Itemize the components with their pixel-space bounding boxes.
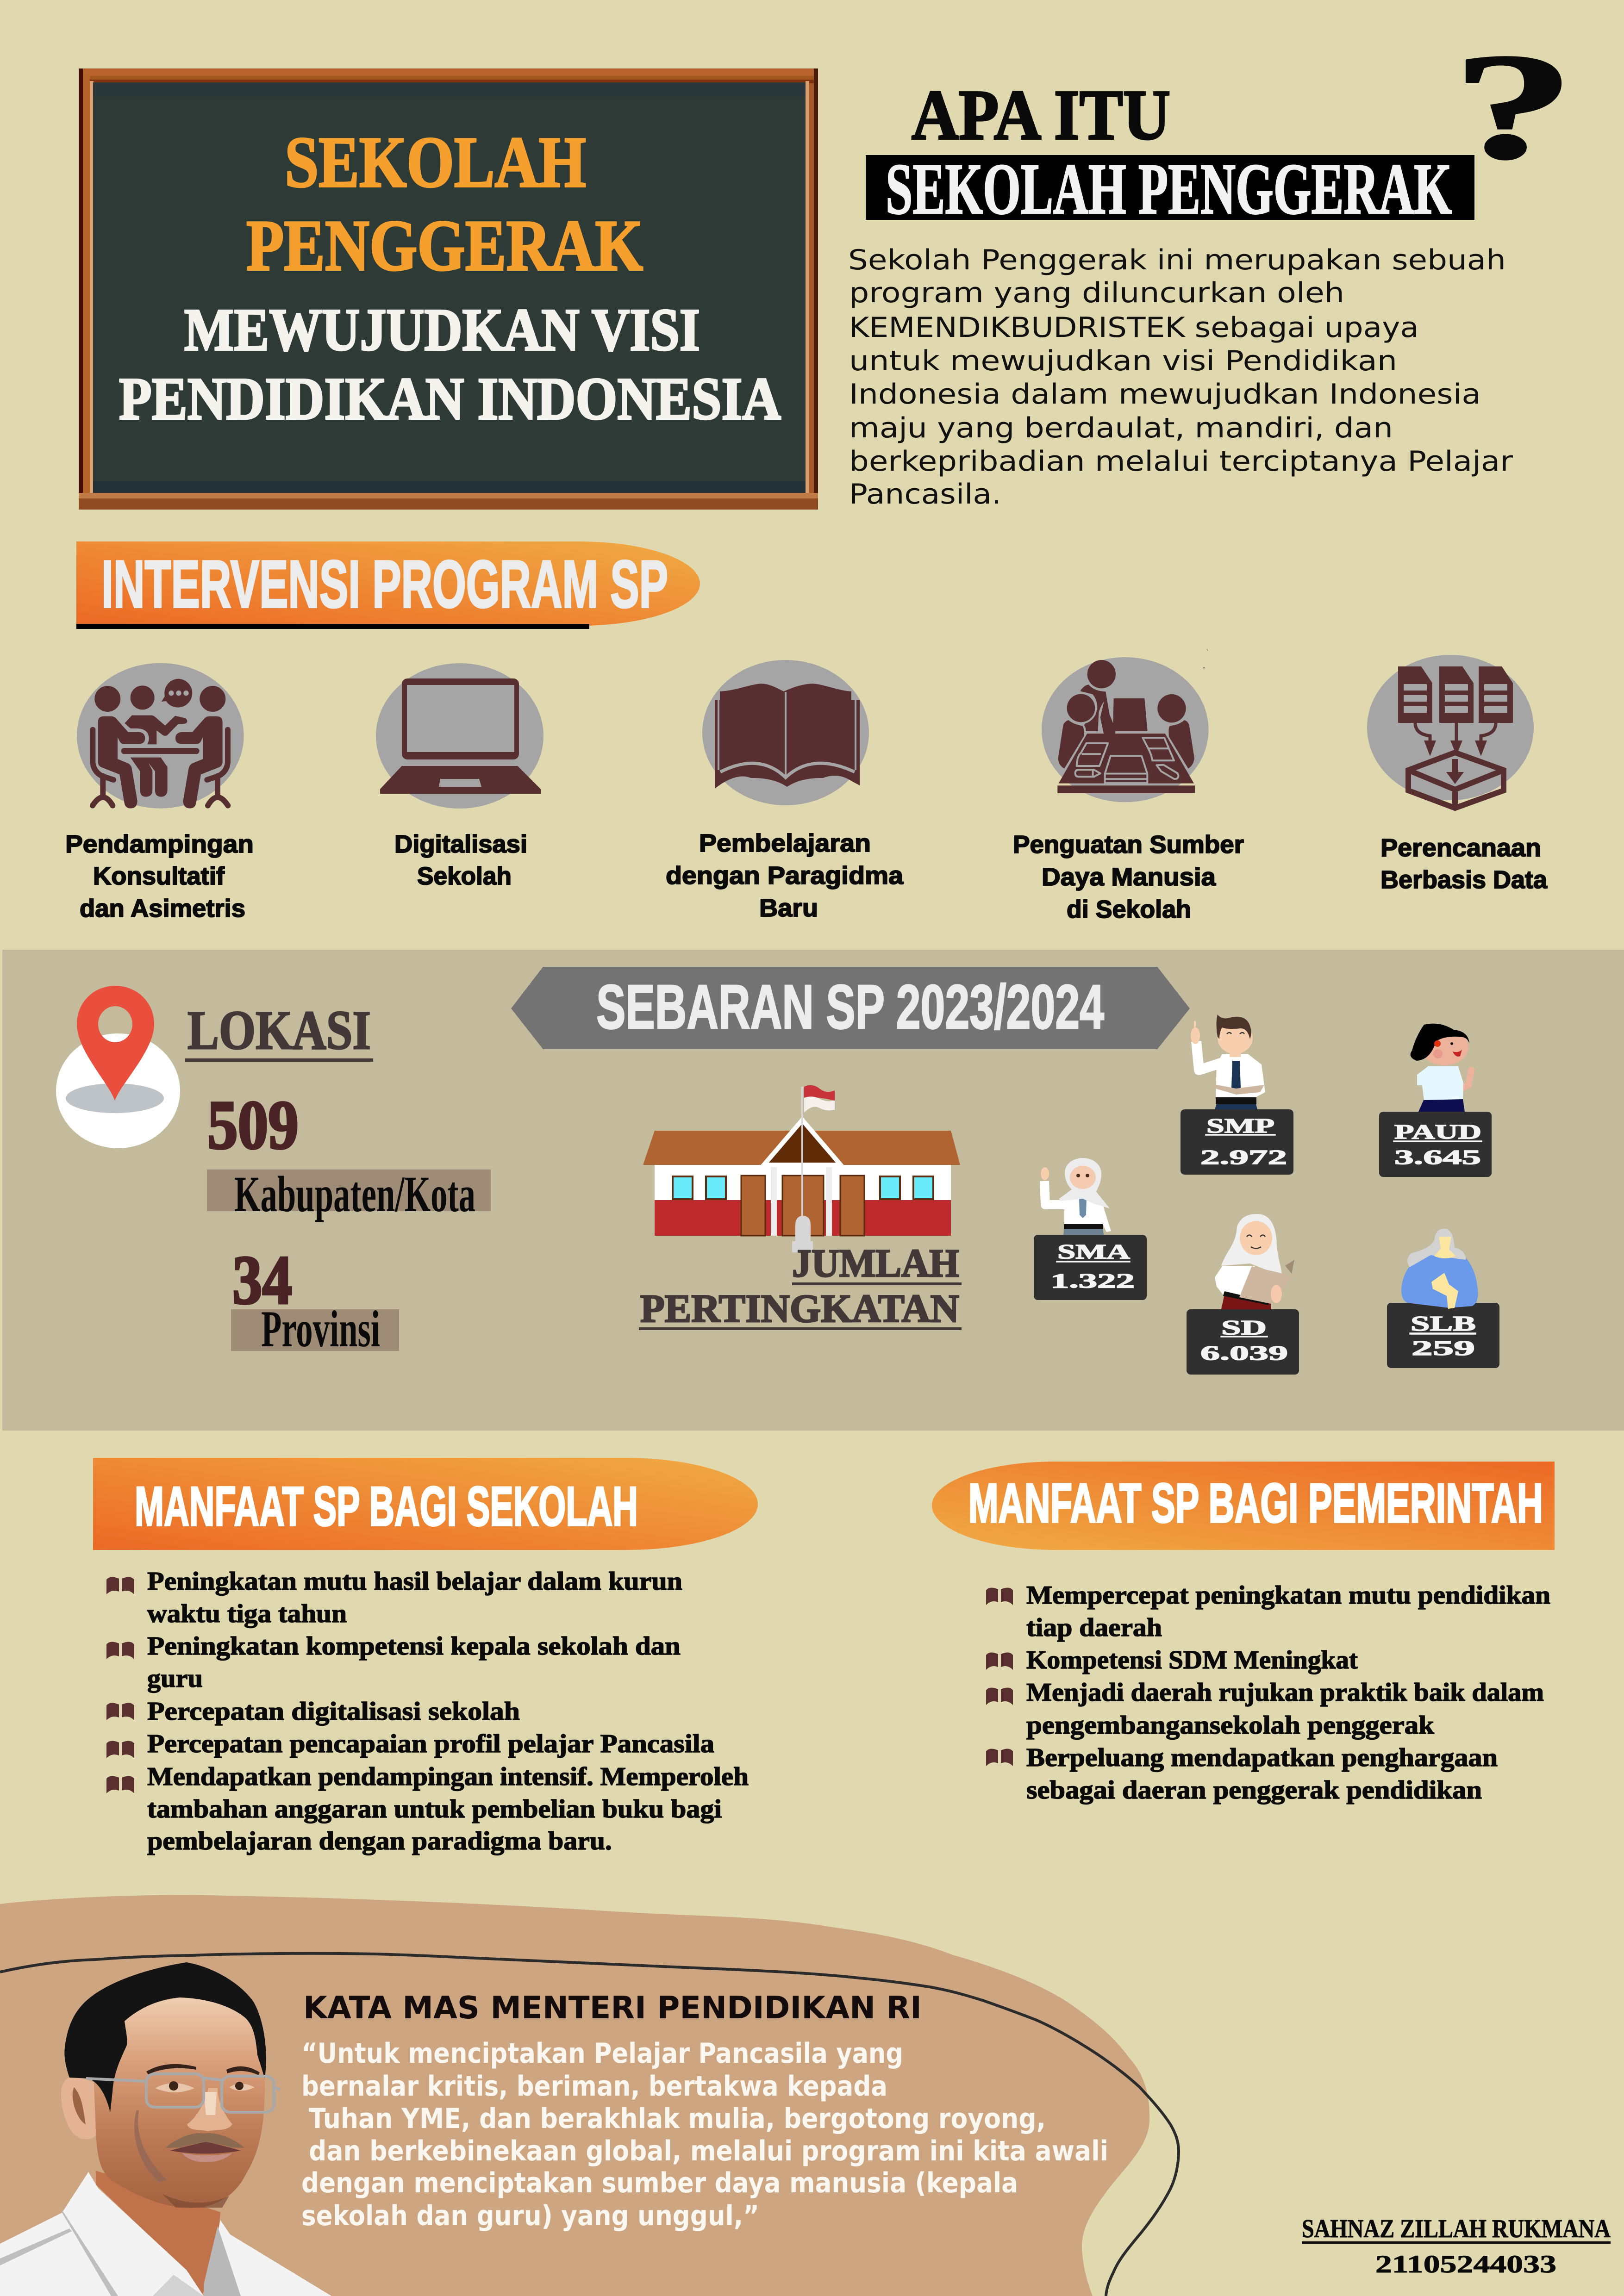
- banner: sebaran: [511, 967, 1190, 1049]
- stat: provinsi: Provinsi: [261, 1300, 380, 1358]
- icon: question mark: ?: [1452, 23, 1575, 190]
- heading: apa itu: APA ITU: [912, 76, 1170, 155]
- card: paud: PAUD: [1394, 1120, 1481, 1143]
- list: manfaat pemerintah: sebagai daeran penggerak pendidikan: [1026, 1776, 1482, 1804]
- list: manfaat pemerintah: Mempercepat peningkatan mutu pendidikan: [1026, 1581, 1550, 1610]
- stat: provinsi: [231, 1242, 399, 1358]
- labels: intervention programs: di Sekolah: [1067, 896, 1191, 923]
- stat: kabupaten kota: 509: [207, 1087, 299, 1164]
- heading: jumlah pertingkatan: PERTINGKATAN: [640, 1286, 959, 1331]
- labels: intervention programs: Baru: [759, 894, 818, 922]
- text block: definition: berkepribadian melalui terciptanya Pelajar: [849, 445, 1513, 478]
- card: smp: 2.972: [1200, 1146, 1287, 1169]
- list: manfaat pemerintah: Menjadi daerah rujukan praktik baik dalam: [1026, 1678, 1544, 1707]
- icon: laptop: [376, 663, 543, 809]
- heading: jumlah pertingkatan: [639, 1241, 962, 1331]
- heading: lokasi: LOKASI: [187, 999, 371, 1061]
- title: PENGGERAK: [246, 205, 643, 286]
- card: sd: 6.039: [1200, 1342, 1288, 1364]
- labels: intervention programs: Sekolah: [417, 862, 512, 890]
- credit: author: [1302, 2215, 1611, 2278]
- figure: sd student: [1215, 1214, 1294, 1309]
- text: quote: Tuhan YME, dan berakhlak mulia, bergotong royong,: [309, 2103, 1046, 2135]
- text: quote: “Untuk menciptakan Pelajar Pancasila yang: [301, 2037, 903, 2070]
- banner: sebaran: SEBARAN SP 2023/2024: [596, 972, 1104, 1042]
- labels: intervention programs: Berbasis Data: [1380, 866, 1548, 894]
- stat: kabupaten kota: [207, 1087, 491, 1222]
- portrait: minister: [0, 1962, 331, 2296]
- panel: quote blob: [0, 1895, 1149, 2296]
- figure: paud student: [1411, 1024, 1471, 1112]
- card: sma: 1.322: [1050, 1269, 1135, 1292]
- list: manfaat sekolah: pembelajaran dengan paradigma baru.: [147, 1827, 612, 1855]
- text block: definition: program yang diluncurkan oleh: [849, 277, 1344, 309]
- text block: definition: Sekolah Penggerak ini merupakan sebuah: [848, 244, 1506, 276]
- text block: definition: maju yang berdaulat, mandiri, dan: [849, 412, 1393, 444]
- icon: pendampingan: [77, 663, 244, 809]
- list: manfaat sekolah: waktu tiga tahun: [147, 1599, 347, 1628]
- card: slb: SLB: [1411, 1312, 1476, 1335]
- list: manfaat pemerintah: Berpeluang mendapatkan penghargaan: [1026, 1743, 1498, 1772]
- labels: intervention programs: dan Asimetris: [80, 895, 245, 922]
- text: quote: dan berkebinekaan global, melalui program ini kita awali: [309, 2135, 1108, 2167]
- title: PENDIDIKAN INDONESIA: [119, 366, 781, 432]
- text: quote: [301, 2037, 1108, 2232]
- list: manfaat sekolah: Percepatan digitalisasi sekolah: [147, 1697, 520, 1726]
- text block: definition: Indonesia dalam mewujudkan Indonesia: [849, 378, 1481, 411]
- text block: definition: Pancasila.: [849, 478, 1001, 510]
- title: [119, 122, 781, 432]
- labels: intervention programs: Digitalisasi: [394, 830, 527, 858]
- list: manfaat pemerintah: pengembangansekolah penggerak: [1026, 1711, 1435, 1740]
- card: paud: [1379, 1112, 1492, 1177]
- card: sd: SD: [1221, 1316, 1267, 1339]
- list: manfaat sekolah: Mendapatkan pendampingan intensif. Memperoleh: [147, 1762, 749, 1791]
- title: MEWUJUDKAN VISI: [184, 297, 700, 363]
- title: SEKOLAH: [285, 122, 586, 202]
- text: quote: dengan menciptakan sumber daya manusia (kepala: [301, 2167, 1018, 2199]
- text: quote: sekolah dan guru) yang unggul,”: [301, 2200, 759, 2232]
- heading banner: intervensi program: INTERVENSI PROGRAM SP: [101, 547, 668, 622]
- banner: manfaat pemerintah: [932, 1462, 1555, 1550]
- list: manfaat sekolah: Peningkatan mutu hasil belajar dalam kurun: [147, 1567, 682, 1596]
- figure: sma student: [1041, 1158, 1111, 1235]
- list: manfaat pemerintah: tiap daerah: [1026, 1613, 1162, 1642]
- heading banner: intervensi program: [76, 541, 700, 629]
- card: sma: SMA: [1057, 1240, 1130, 1263]
- figure: smp student: [1191, 1014, 1265, 1109]
- card: sd: [1187, 1309, 1299, 1375]
- banner: manfaat sekolah: [93, 1458, 758, 1550]
- icon: open book: [702, 660, 869, 805]
- list: manfaat pemerintah: [986, 1581, 1550, 1804]
- labels: intervention programs: dengan Paragidma: [666, 862, 904, 890]
- card: smp: [1181, 1109, 1293, 1175]
- icon: meeting human resources: [1042, 649, 1209, 802]
- card: slb: [1387, 1303, 1499, 1368]
- credit: author: 21105244033: [1375, 2250, 1556, 2278]
- card: slb: 259: [1412, 1336, 1475, 1360]
- list: manfaat sekolah: tambahan anggaran untuk pembelian buku bagi: [147, 1795, 722, 1823]
- list: manfaat pemerintah: Kompetensi SDM Meningkat: [1026, 1646, 1358, 1674]
- icon: location pin: [56, 986, 180, 1148]
- curved line: [0, 1954, 1179, 2296]
- labels: intervention programs: Penguatan Sumber: [1013, 831, 1244, 859]
- illustration: school building: [643, 1085, 960, 1252]
- stat: kabupaten kota: Kabupaten/Kota: [234, 1166, 475, 1222]
- labels: intervention programs: Pembelajaran: [699, 829, 871, 857]
- card: sma: [1034, 1235, 1147, 1300]
- labels: intervention programs: [65, 829, 1548, 923]
- labels: intervention programs: Daya Manusia: [1042, 863, 1216, 891]
- labels: intervention programs: Perencanaan: [1380, 834, 1541, 862]
- text: quote: bernalar kritis, beriman, bertakwa kepada: [301, 2070, 887, 2103]
- card: paud: 3.645: [1394, 1146, 1481, 1169]
- panel: sebaran: [2, 950, 1624, 1431]
- text block: definition: untuk mewujudkan visi Pendidikan: [849, 345, 1397, 377]
- figure: slb student: [1401, 1229, 1478, 1309]
- labels: intervention programs: Konsultatif: [93, 862, 225, 890]
- text block: definition: [848, 244, 1513, 510]
- stat: provinsi: 34: [232, 1242, 292, 1319]
- list: manfaat sekolah: Peningkatan kompetensi kepala sekolah dan: [147, 1632, 681, 1661]
- banner: manfaat sekolah: MANFAAT SP BAGI SEKOLAH: [135, 1475, 638, 1537]
- text block: definition: KEMENDIKBUDRISTEK sebagai upaya: [849, 311, 1419, 344]
- list: manfaat sekolah: Percepatan pencapaian profil pelajar Pancasila: [147, 1730, 714, 1758]
- labels: intervention programs: Pendampingan: [65, 830, 254, 858]
- card: smp: SMP: [1206, 1114, 1274, 1137]
- text: quote title: KATA MAS MENTERI PENDIDIKAN RI: [303, 1990, 922, 2026]
- heading: jumlah pertingkatan: JUMLAH: [792, 1241, 959, 1285]
- list: manfaat sekolah: [106, 1567, 749, 1855]
- icon: data planning: [1367, 655, 1534, 808]
- list: manfaat sekolah: guru: [147, 1664, 203, 1693]
- panel: blackboard title: [79, 68, 818, 510]
